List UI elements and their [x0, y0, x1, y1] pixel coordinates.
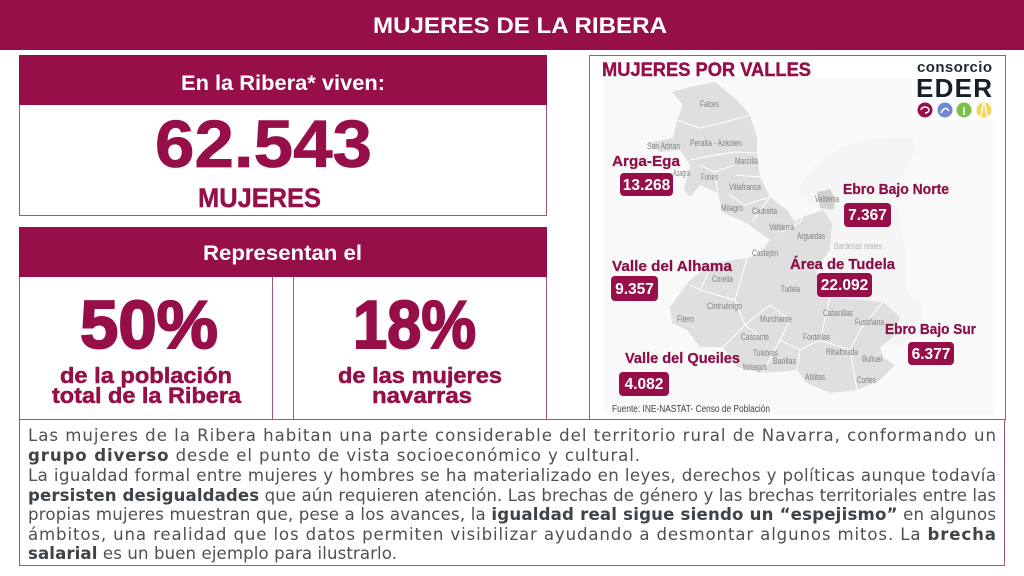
stat: 18 percent: navarras — [372, 383, 472, 408]
municipality labels: Villafranca — [729, 182, 761, 192]
municipality labels: Tulebras — [753, 348, 778, 358]
map of the Ribera — [604, 77, 995, 415]
municipality labels: Falces — [700, 99, 719, 109]
panel: explanatory text: ámbitos, una realidad que los datos permiten visibilizar ayudando a desmontar algunos mitos. La brecha — [28, 525, 996, 544]
municipality labels: Ribaforada — [826, 347, 858, 357]
municipality labels — [647, 99, 884, 385]
municipality labels: Monteagudo — [743, 362, 767, 372]
panel: explanatory text: La igualdad formal entre mujeres y hombres se ha materializado en leyes, derechos y políticas aunque todavía — [28, 466, 996, 485]
valley: Valle del Queiles: 4.082 — [625, 376, 663, 393]
municipality labels: Azagra — [673, 168, 690, 178]
caption: mujeres: MUJERES — [198, 183, 321, 213]
stat: 18 percent: 18% — [353, 287, 476, 363]
logo: consorcio EDER: consorcio — [917, 59, 992, 76]
municipality labels: Cadreita — [752, 206, 777, 216]
municipality labels: Marcilla — [735, 156, 758, 166]
valley: Ebro Bajo Sur — [885, 321, 976, 365]
panel: total women — [19, 55, 547, 216]
stat: 50 percent: de la población — [60, 363, 232, 388]
valley: Valle del Alhama — [611, 258, 733, 301]
municipality labels: Bardenas reales — [834, 241, 882, 251]
municipality labels: Ablitas — [805, 372, 825, 382]
valley: Arga-Ega: 13.268 — [623, 177, 671, 194]
stat: 50 percent: 50% — [80, 287, 218, 363]
source note: Fuente: INE-NASTAT- Censo de Población — [612, 404, 770, 415]
municipality labels: Fustiñana — [855, 317, 884, 327]
municipality labels: Tudela — [781, 284, 800, 294]
valley: Valle del Alhama: Valle del Alhama — [612, 258, 733, 275]
municipality labels: Murchante — [760, 314, 792, 324]
logo: consorcio EDER: EDER — [916, 73, 992, 103]
stat: 50 percent — [52, 287, 242, 408]
municipality labels: Valtierra — [815, 194, 839, 204]
panel: explanatory text: salarial es un buen ejemplo para ilustrarlo. — [28, 544, 397, 563]
panel: map of women by valley — [590, 56, 1006, 420]
municipality labels: Castejón — [752, 248, 778, 258]
municipality labels: Barillas — [773, 356, 796, 366]
valley: Ebro Bajo Norte — [843, 181, 949, 227]
valley: Área de Tudela: Área de Tudela — [790, 256, 896, 273]
panel: explanatory text: propias mujeres muestran que, pese a los avances, la igualdad real sigue siendo un “espejismo” en algunos — [28, 505, 996, 524]
valley: Arga-Ega: Arga-Ega — [612, 153, 681, 170]
municipality labels: Cortes — [857, 375, 876, 385]
valley: Área de Tudela: 22.092 — [821, 277, 868, 294]
panel heading: En la Ribera viven: En la Ribera* viven: — [181, 72, 385, 95]
municipality labels: Cascante — [741, 332, 769, 342]
valley: Ebro Bajo Sur: Ebro Bajo Sur — [885, 321, 976, 338]
logo: consorcio EDER — [912, 59, 996, 120]
municipality labels: Cintruénigo — [707, 301, 742, 311]
panel heading: Representan el: Representan el — [203, 242, 362, 265]
municipality labels: Fitero — [677, 314, 694, 324]
panel: explanatory text: grupo diverso desde el punto de vista socioeconómico y cultural. — [28, 446, 640, 465]
municipality labels: Cabanillas — [823, 308, 853, 318]
valley: Arga-Ega — [612, 153, 681, 196]
valley: Ebro Bajo Norte: Ebro Bajo Norte — [843, 181, 949, 198]
valley: Valle del Alhama: 9.357 — [615, 281, 654, 298]
panel: explanatory text: Las mujeres de la Ribera habitan una parte considerable del territorio rural de Navarra, conformando un — [28, 426, 996, 445]
valley: Valle del Queiles: Valle del Queiles — [625, 350, 740, 367]
valley: Ebro Bajo Norte: 7.367 — [848, 207, 887, 224]
title banner — [0, 0, 1024, 50]
panel: explanatory text — [20, 420, 1004, 566]
stat: 50 percent: total de la Ribera — [52, 383, 242, 408]
stat: 18 percent — [338, 287, 502, 408]
stat: 18 percent: de las mujeres — [338, 363, 502, 388]
municipality labels: Milagro — [721, 203, 743, 213]
valley: Ebro Bajo Sur: 6.377 — [912, 346, 950, 363]
map heading: MUJERES POR VALLES — [602, 60, 811, 81]
municipality labels: Peralta - Azkoien — [690, 138, 742, 148]
panel: share of population — [19, 227, 547, 420]
municipality labels: Corella — [712, 274, 733, 284]
title banner: MUJERES DE LA RIBERA — [373, 13, 667, 38]
municipality labels: San Adrian — [647, 141, 680, 151]
municipality labels: Fontellas — [803, 332, 830, 342]
municipality labels: Buñuel — [862, 354, 882, 364]
big number: 62.543: 62.543 — [155, 107, 372, 182]
municipality labels: Funes — [701, 172, 718, 182]
valley: Valle del Queiles — [619, 350, 740, 396]
panel: explanatory text: persisten desigualdades que aún requieren atención. Las brechas de género y las brechas territoriales entre las — [28, 486, 996, 505]
municipality labels: Valtierra — [769, 222, 794, 232]
municipality labels: Arguedas — [797, 231, 825, 241]
valley: Área de Tudela — [790, 256, 896, 297]
